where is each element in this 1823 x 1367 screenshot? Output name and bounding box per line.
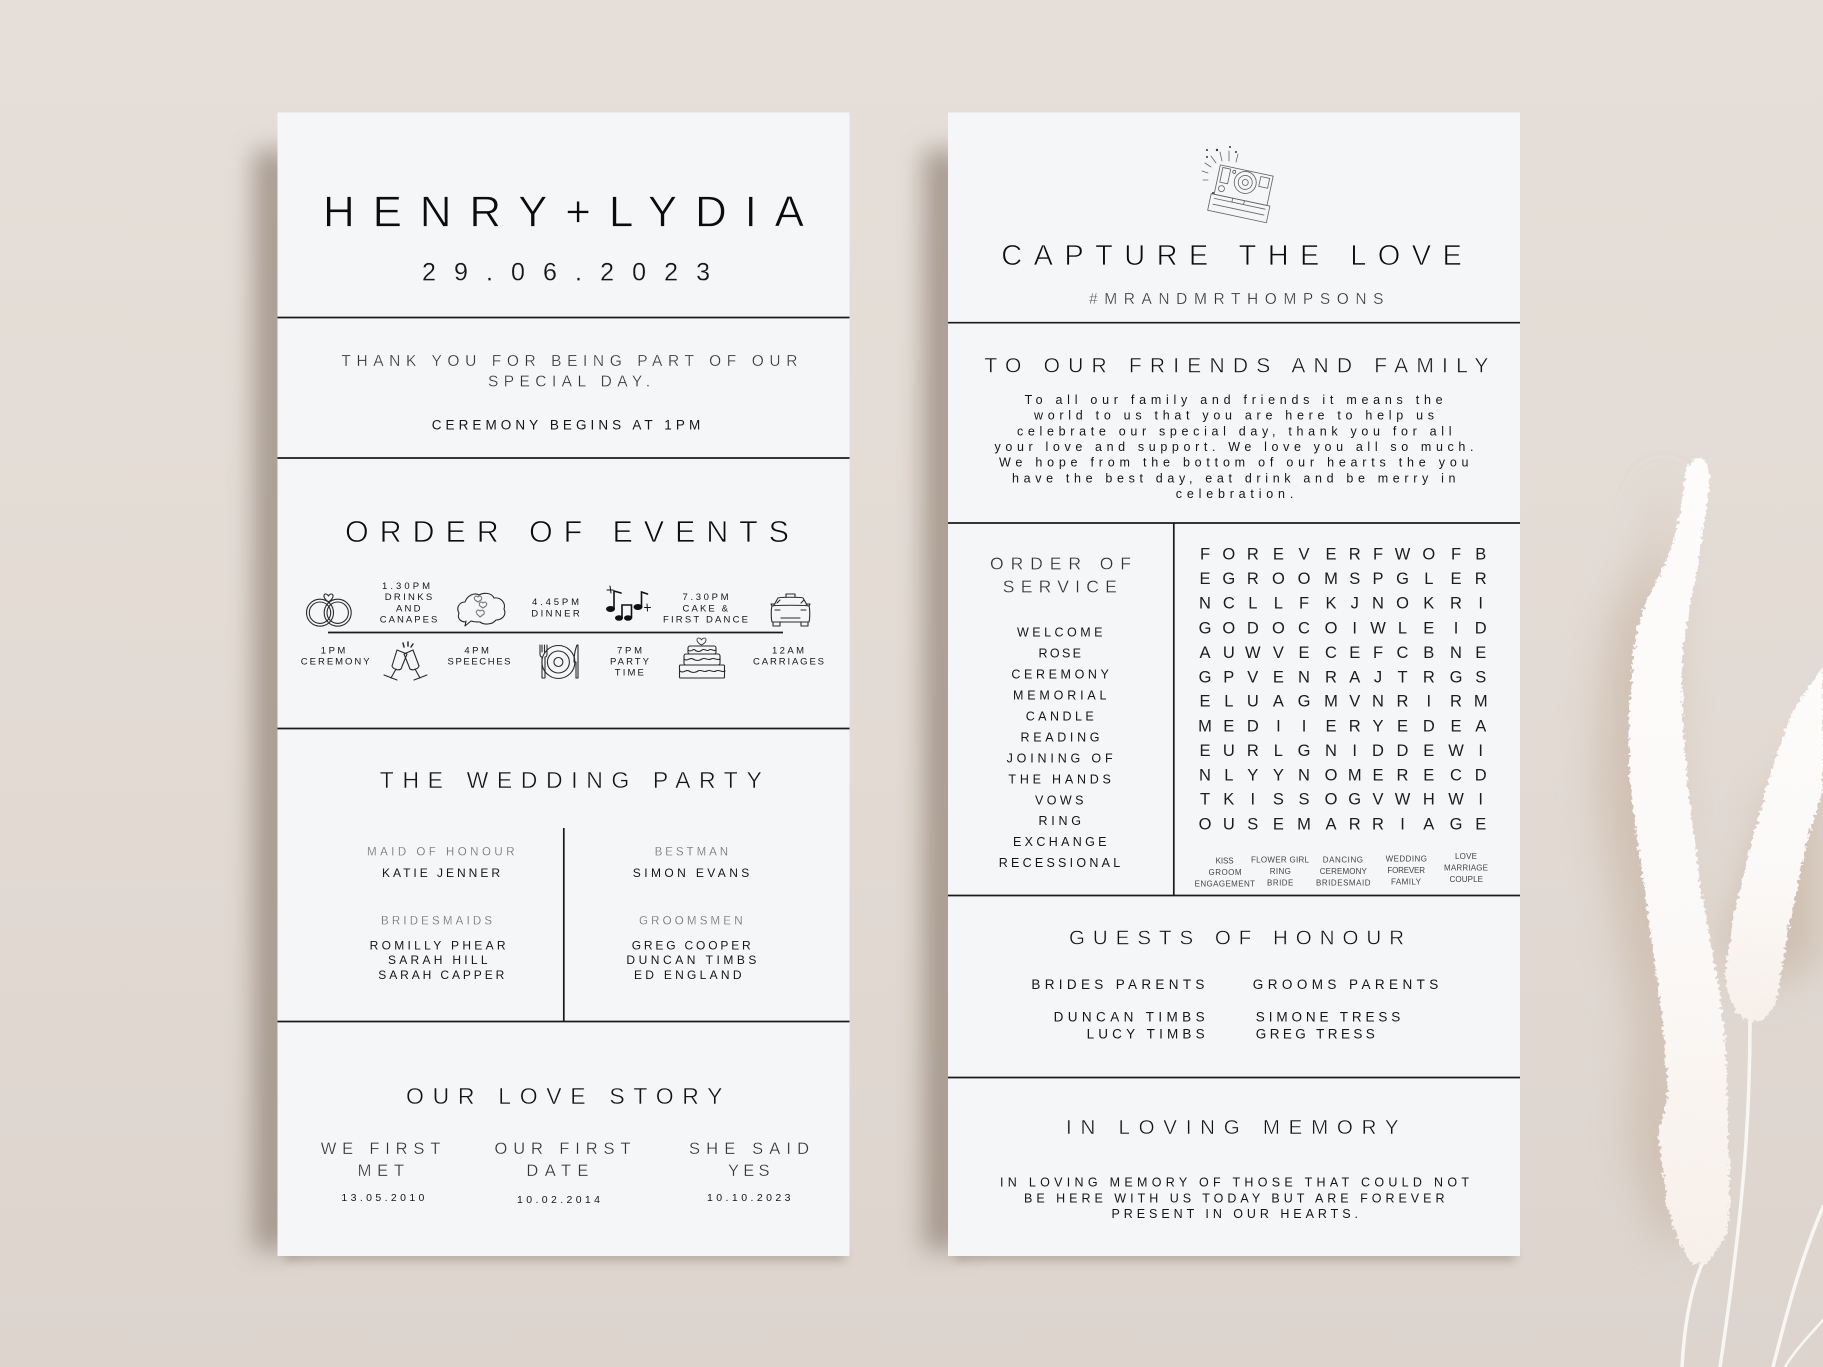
milestone: our first date: 10.02.2014	[517, 1194, 600, 1206]
order of service list: THE HANDS	[1008, 772, 1111, 786]
word search grid: MEDIIERYEDEA	[1198, 717, 1486, 735]
message to friends and family: your love and support. We love you all so much.	[994, 440, 1474, 454]
timeline label: 4.45pm dinner	[531, 597, 580, 620]
word search grid: OUSEMARRIAGE	[1199, 815, 1486, 833]
word search word list: COUPLE	[1450, 875, 1483, 884]
word search word list: GROOM	[1208, 868, 1242, 877]
grooms parents	[1253, 977, 1438, 1041]
card sheet	[278, 112, 850, 1256]
heading: capture the love: CAPTURE THE LOVE	[1001, 240, 1462, 272]
timeline label: 4.45pm dinner: 4.45PM	[532, 597, 579, 608]
order of service list: RECESSIONAL	[999, 856, 1120, 870]
order of service list: CANDLE	[1026, 709, 1094, 723]
hashtag: #MRANDMRTHOMPSONS	[1089, 291, 1384, 308]
card sheet	[948, 112, 1520, 1256]
bridesmaids: SARAH HILL	[388, 953, 488, 967]
word search word list: ENGAGEMENT	[1195, 879, 1255, 888]
brides parents: DUNCAN TIMBS	[1054, 1009, 1205, 1024]
groomsmen: GREG COOPER	[632, 939, 751, 953]
order of service list: RING	[1038, 814, 1081, 828]
heading: guests of honour: GUESTS OF HONOUR	[1069, 926, 1404, 949]
timeline label: 12am carriages: 12AM	[772, 645, 804, 656]
brides parents	[1031, 977, 1205, 1041]
message to friends and family: celebrate our special day, thank you for all	[1017, 424, 1452, 438]
word search grid: NCLLFKJNOKRI	[1199, 595, 1483, 613]
word search grid: GPVENRAJTRGS	[1199, 669, 1486, 687]
order of service list: CEREMONY	[1011, 668, 1110, 682]
icon: champagne glasses	[384, 642, 427, 680]
order of service list: MEMORIAL	[1013, 689, 1107, 703]
timeline label: 1.30pm drinks and canapes: CANAPES	[380, 615, 437, 626]
timeline label: 7.30pm cake and first dance: FIRST DANCE	[663, 615, 748, 626]
milestone: we first met: WE FIRST	[321, 1140, 440, 1158]
title: couple names: HENRY+LYDIA	[323, 188, 805, 236]
order of service list: WELCOME	[1017, 626, 1102, 640]
card shadows	[254, 150, 1515, 1260]
icon: wedding rings	[306, 594, 351, 626]
word search grid: ELUAGMVNRIRM	[1199, 693, 1488, 711]
groomsmen: GROOMSMEN	[639, 915, 742, 927]
timeline label: 12am carriages	[753, 645, 824, 668]
timeline label: 7pm party time: TIME	[615, 668, 644, 679]
timeline label: 7pm party time	[610, 645, 650, 679]
heading: to our friends and family: TO OUR FRIENDS AND FAMILY	[984, 355, 1488, 378]
timeline label: 4.45pm dinner: DINNER	[531, 608, 580, 620]
message to friends and family: celebration.	[1176, 487, 1293, 501]
word search word list	[1195, 852, 1488, 888]
milestone: she said yes: 10.10.2023	[707, 1192, 791, 1204]
grooms parents: SIMONE TRESS	[1256, 1009, 1400, 1024]
heading: in loving memory: IN LOVING MEMORY	[1066, 1116, 1399, 1139]
wedding date: 29.06.2023	[422, 259, 710, 287]
milestone: she said yes	[689, 1140, 809, 1204]
word search word list: FLOWER GIRL	[1251, 855, 1310, 864]
ceremony start time: CEREMONY BEGINS AT 1PM	[432, 418, 700, 433]
icon: plate and cutlery	[540, 645, 578, 678]
plume shadows	[1598, 470, 1823, 1240]
word search word list: DANCING	[1323, 855, 1363, 864]
word search word list: FAMILY	[1391, 877, 1422, 886]
bestman	[633, 846, 749, 880]
bridesmaids: SARAH CAPPER	[378, 968, 505, 982]
timeline label: 1.30pm drinks and canapes: 1.30PM	[382, 581, 430, 592]
timeline label: 1.30pm drinks and canapes: AND	[396, 604, 421, 615]
milestone: our first date	[494, 1140, 630, 1206]
thank-you message: THANK YOU FOR BEING PART OF OUR	[341, 353, 797, 370]
word search word list: KISS	[1216, 856, 1234, 865]
message to friends and family: have the best day, eat drink and be merry in	[1012, 471, 1456, 485]
timeline label: 1pm ceremony: CEREMONY	[301, 657, 370, 668]
plume right	[1725, 666, 1823, 1022]
icon: music notes	[606, 586, 650, 621]
order of service list: VOWS	[1035, 793, 1084, 807]
memorial message: PRESENT IN OUR HEARTS.	[1112, 1207, 1358, 1221]
divider lines	[948, 323, 1520, 1078]
plume left	[1629, 458, 1730, 1264]
pampas grass	[1598, 458, 1823, 1367]
timeline label: 7.30pm cake and first dance: 7.30PM	[682, 592, 729, 603]
bestman: BESTMAN	[655, 846, 728, 858]
timeline label: 1.30pm drinks and canapes: DRINKS	[385, 592, 432, 603]
icon: instant camera with flash	[1202, 146, 1276, 223]
timeline label: 4pm speeches: SPEECHES	[448, 657, 510, 668]
brides parents: BRIDES PARENTS	[1031, 977, 1204, 992]
order of service list	[999, 626, 1120, 870]
word search word list: MARRIAGE	[1444, 863, 1488, 872]
groomsmen: ED ENGLAND	[634, 968, 742, 982]
milestone: she said yes: SHE SAID	[689, 1140, 809, 1158]
heading: order of service	[990, 553, 1131, 597]
timeline label: 7.30pm cake and first dance	[663, 592, 748, 626]
bridesmaids	[370, 915, 506, 982]
milestone: she said yes: YES	[728, 1162, 770, 1180]
word search grid: NLYYNOMERECD	[1199, 767, 1487, 785]
heading: order of service: SERVICE	[1003, 577, 1117, 597]
message to friends and family: world to us that you are here to help us	[1033, 409, 1434, 423]
timeline label: 4pm speeches	[448, 645, 510, 668]
right programme card	[948, 112, 1520, 1256]
milestone: we first met: MET	[358, 1162, 404, 1180]
word search word list: CEREMONY	[1320, 867, 1367, 876]
timeline label: 7pm party time: 7PM	[617, 645, 642, 656]
grooms parents: GREG TRESS	[1256, 1026, 1375, 1041]
heading: order of service: ORDER OF	[990, 553, 1131, 573]
maid of honour: KATIE JENNER	[382, 866, 500, 880]
milestone: we first met	[321, 1140, 440, 1204]
grooms parents: GROOMS PARENTS	[1253, 977, 1438, 992]
order of service list: EXCHANGE	[1013, 835, 1106, 849]
maid of honour: MAID OF HONOUR	[367, 846, 514, 858]
word search grid: EURLGNIDDEWI	[1199, 742, 1483, 760]
heading: the wedding party: THE WEDDING PARTY	[380, 767, 762, 793]
word search word list: LOVE	[1455, 852, 1477, 861]
timeline label: 12am carriages: CARRIAGES	[753, 657, 824, 668]
word search word list: BRIDE	[1267, 878, 1293, 887]
word search grid: AUWVECEFCBNE	[1199, 644, 1486, 662]
word search grid	[1198, 545, 1488, 833]
bridesmaids: BRIDESMAIDS	[381, 915, 492, 927]
timeline label: 7pm party time: PARTY	[610, 657, 650, 668]
heading: order of events: ORDER OF EVENTS	[345, 515, 789, 549]
word search word list: WEDDING	[1386, 854, 1427, 863]
maid of honour	[367, 846, 514, 880]
order of service list: READING	[1020, 730, 1100, 744]
order of service list: JOINING OF	[1007, 751, 1113, 765]
timeline label: 4pm speeches: 4PM	[464, 645, 489, 656]
stems	[1682, 1020, 1823, 1367]
bridesmaids: ROMILLY PHEAR	[370, 939, 506, 953]
brides parents: LUCY TIMBS	[1087, 1026, 1205, 1041]
word search word list: RING	[1270, 867, 1291, 876]
word search grid: FOREVERFWOFB	[1200, 545, 1486, 563]
heading: our love story: OUR LOVE STORY	[406, 1083, 722, 1109]
groomsmen	[626, 915, 756, 982]
timeline label: 1.30pm drinks and canapes	[380, 581, 437, 626]
left programme card	[278, 112, 850, 1256]
timeline label: 1pm ceremony: 1PM	[321, 645, 345, 656]
timeline label: 7.30pm cake and first dance: CAKE &	[682, 604, 729, 615]
word search word list: BRIDESMAID	[1316, 878, 1371, 887]
message to friends and family	[994, 393, 1474, 501]
milestone: our first date: OUR FIRST	[494, 1140, 630, 1158]
bestman: SIMON EVANS	[633, 866, 749, 880]
timeline axis	[328, 632, 783, 634]
icon: speech bubble with hearts	[458, 593, 505, 626]
groomsmen: DUNCAN TIMBS	[626, 953, 756, 967]
divider lines	[278, 318, 850, 1022]
thank-you message	[341, 353, 797, 390]
message to friends and family: We hope from the bottom of our hearts the you	[999, 456, 1469, 470]
milestone: our first date: DATE	[526, 1162, 588, 1180]
timeline label: 1pm ceremony	[301, 645, 370, 668]
memorial message: IN LOVING MEMORY OF THOSE THAT COULD NOT	[1000, 1176, 1469, 1190]
word search word list: FOREVER	[1387, 866, 1425, 875]
memorial message	[1000, 1176, 1469, 1221]
word search grid: EGROOMSPGLER	[1199, 570, 1487, 588]
message to friends and family: To all our family and friends it means the	[1025, 393, 1443, 407]
memorial message: BE HERE WITH US TODAY BUT ARE FOREVER	[1024, 1191, 1444, 1205]
milestone: we first met: 13.05.2010	[341, 1192, 425, 1204]
icon: taxi car	[771, 594, 810, 626]
word search grid: TKISSOGVWHWI	[1200, 791, 1483, 809]
order of service list: ROSE	[1038, 647, 1081, 661]
thank-you message: SPECIAL DAY.	[488, 373, 650, 390]
icon: wedding cake	[680, 638, 725, 678]
word search grid: GODOCOIWLEID	[1199, 619, 1487, 637]
